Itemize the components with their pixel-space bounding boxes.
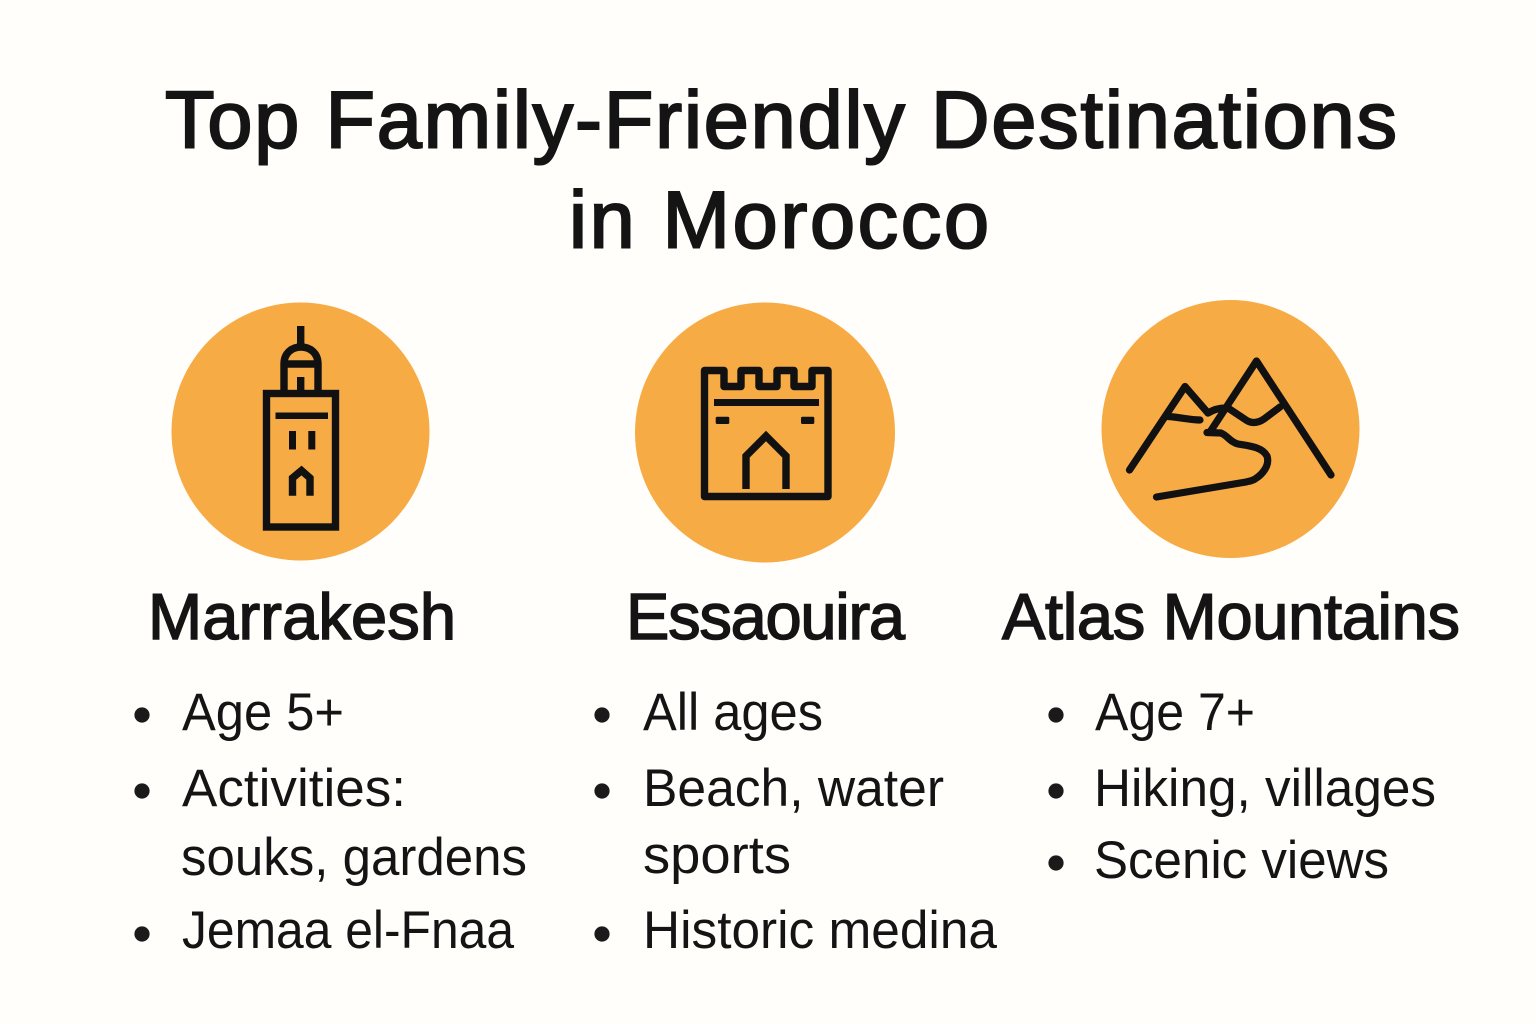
list: Marrakesh details: Activities: bbox=[182, 759, 406, 818]
list: Marrakesh details: Age 5+ bbox=[182, 683, 344, 742]
icon: minaret tower bbox=[172, 302, 430, 560]
title: in Morocco bbox=[569, 176, 989, 266]
panel: Atlas Mountains bbox=[1002, 300, 1460, 890]
title bbox=[165, 76, 1397, 266]
list: Essaouira details bbox=[594, 683, 998, 960]
panel: Essaouira bbox=[594, 302, 998, 960]
icon: mountains with winding path bbox=[1102, 300, 1360, 558]
title: Top Family-Friendly Destinations bbox=[165, 76, 1397, 166]
panel: Marrakesh bbox=[134, 302, 527, 960]
list: Atlas Mountains details: Age 7+ bbox=[1095, 683, 1255, 742]
heading: Essaouira: Essaouira bbox=[626, 580, 906, 653]
heading: Atlas Mountains: Atlas Mountains bbox=[1002, 580, 1460, 653]
list: Atlas Mountains details: Hiking, villages bbox=[1094, 759, 1436, 818]
list: Atlas Mountains details: Scenic views bbox=[1094, 831, 1389, 890]
list: Essaouira details: Historic medina bbox=[643, 901, 998, 960]
list: Essaouira details: All ages bbox=[643, 683, 823, 742]
list: Marrakesh details: Jemaa el-Fnaa bbox=[182, 901, 515, 960]
list: Essaouira details: sports bbox=[643, 826, 791, 885]
heading: Marrakesh: Marrakesh bbox=[148, 580, 456, 653]
list: Essaouira details: Beach, water bbox=[643, 759, 944, 818]
list: Atlas Mountains details bbox=[1048, 683, 1436, 890]
list: Marrakesh details bbox=[134, 683, 527, 960]
icon: fortress gate bbox=[635, 302, 895, 562]
list: Marrakesh details: souks, gardens bbox=[181, 828, 527, 887]
